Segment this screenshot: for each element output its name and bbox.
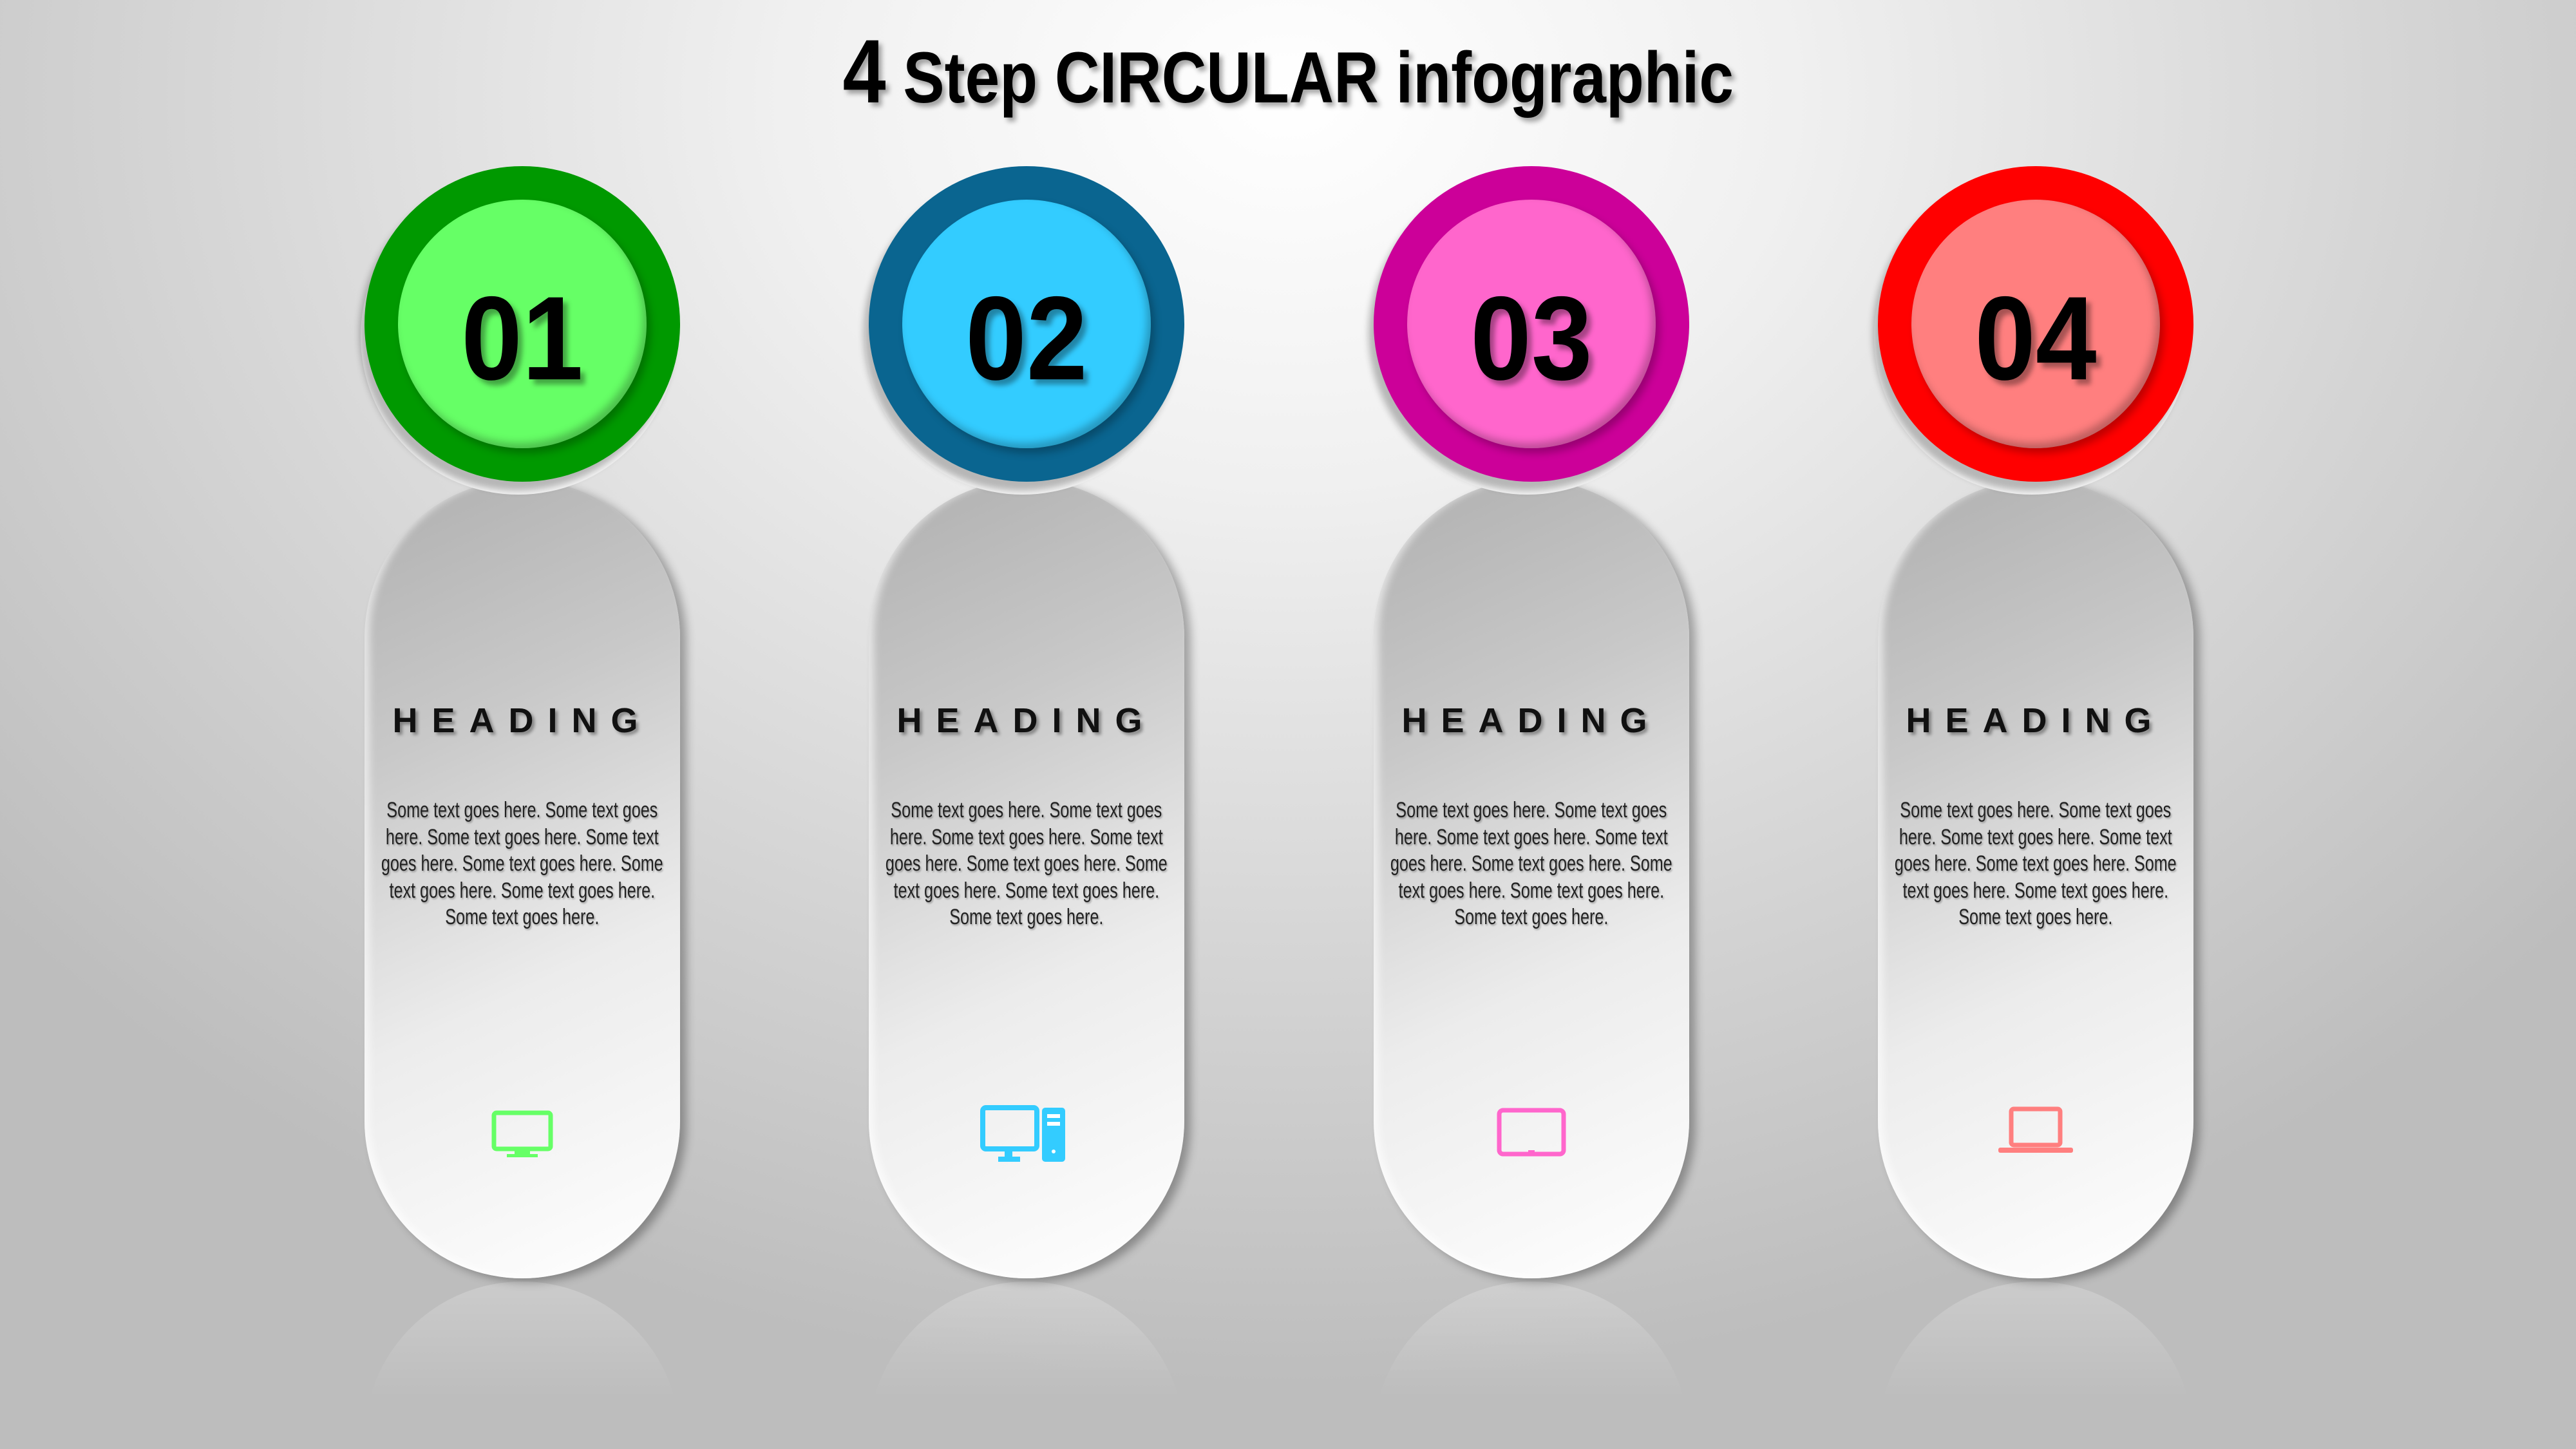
body text 04 xyxy=(1895,798,2178,931)
body text 03: goes here. Some text goes here. Some xyxy=(1390,851,1672,876)
heading 02: HEADING xyxy=(896,701,1157,740)
card 01 xyxy=(365,480,680,1278)
number circle 01: 01 xyxy=(461,272,583,405)
body text 01: text goes here. Some text goes here. xyxy=(390,878,655,903)
number circle 02 xyxy=(869,166,1184,482)
icon: desktop computer xyxy=(980,1105,1065,1162)
icon: laptop xyxy=(1998,1106,2073,1153)
body text 03 xyxy=(1390,798,1673,931)
panel: step 03 xyxy=(1365,166,1700,1329)
body text 02 xyxy=(886,798,1168,931)
body text 04: goes here. Some text goes here. Some xyxy=(1895,851,2177,876)
icon: tablet xyxy=(1497,1108,1566,1157)
heading 01: HEADING xyxy=(392,701,652,740)
body text 03: Some text goes here. Some text goes xyxy=(1396,798,1667,822)
number circle 02: 02 xyxy=(965,272,1088,405)
number circle 01 xyxy=(365,166,680,482)
card 02 xyxy=(869,480,1184,1278)
body text 02: Some text goes here. xyxy=(949,905,1104,929)
body text 02: goes here. Some text goes here. Some xyxy=(886,851,1168,876)
body text 02: here. Some text goes here. Some text xyxy=(890,825,1163,849)
number circle 03: 03 xyxy=(1470,272,1593,405)
body text 01: here. Some text goes here. Some text xyxy=(386,825,659,849)
body text 02: text goes here. Some text goes here. xyxy=(894,878,1159,903)
body text 02: Some text goes here. Some text goes xyxy=(891,798,1162,822)
icon: monitor xyxy=(492,1110,553,1157)
heading 04: HEADING xyxy=(1906,701,2165,740)
heading 03: HEADING xyxy=(1401,701,1662,740)
panel: step 01 xyxy=(356,166,692,1331)
body text 01 xyxy=(381,798,665,931)
body text 01: goes here. Some text goes here. Some xyxy=(381,851,663,876)
body text 01: Some text goes here. Some text goes xyxy=(387,798,658,822)
panel: step 04 xyxy=(1869,166,2205,1331)
panel: step 02 xyxy=(860,166,1196,1329)
card 04 xyxy=(1878,480,2193,1278)
number circle 04: 04 xyxy=(1975,272,2097,405)
body text 03: here. Some text goes here. Some text xyxy=(1395,825,1668,849)
body text 03: text goes here. Some text goes here. xyxy=(1399,878,1664,903)
number circle 04 xyxy=(1878,166,2193,482)
body text 04: Some text goes here. xyxy=(1958,905,2113,929)
body text 01: Some text goes here. xyxy=(445,905,600,929)
body text 04: text goes here. Some text goes here. xyxy=(1903,878,2168,903)
number circle 03 xyxy=(1374,166,1689,482)
title: 4 Step CIRCULAR infographic xyxy=(842,21,1734,122)
body text 04: here. Some text goes here. Some text xyxy=(1899,825,2172,849)
card 03 xyxy=(1374,480,1689,1278)
body text 03: Some text goes here. xyxy=(1454,905,1609,929)
body text 04: Some text goes here. Some text goes xyxy=(1900,798,2171,822)
